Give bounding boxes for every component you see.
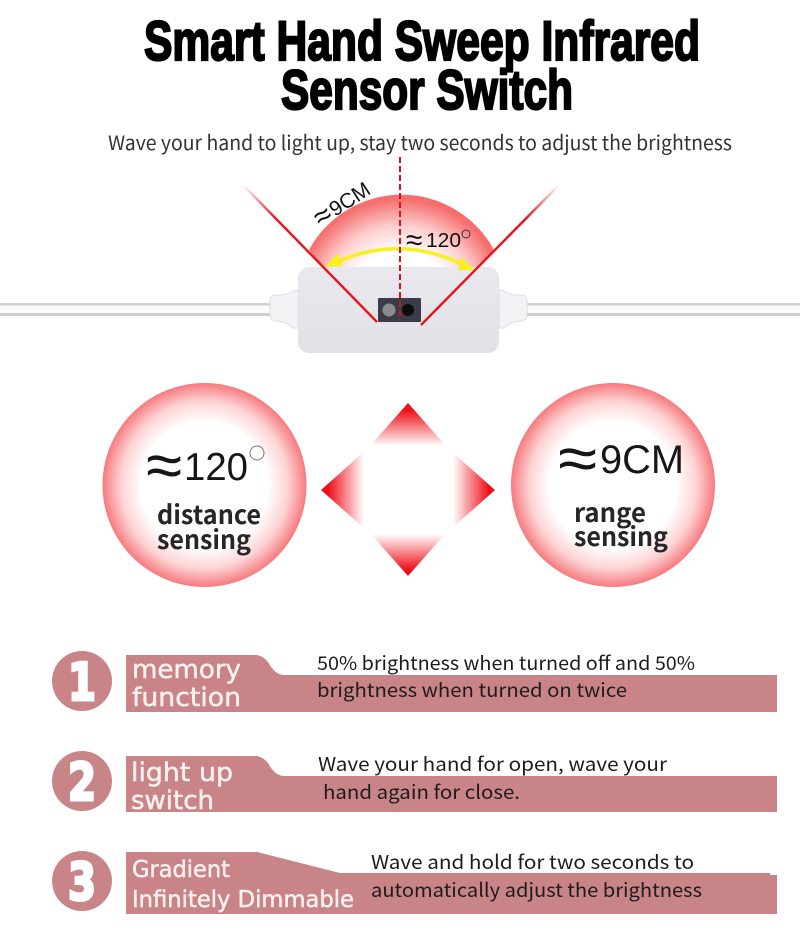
description 1 (317, 649, 695, 703)
bottom arrow (370, 533, 446, 576)
yellow arc arrow (325, 249, 475, 270)
red detection dome (309, 195, 494, 275)
title (144, 9, 700, 121)
large range value: ≈ (558, 422, 597, 494)
number badge 2 (52, 751, 112, 813)
large angle value (146, 429, 264, 501)
large range value (558, 422, 684, 494)
subtitle: Wave your hand to light up, stay two seconds to adjust the brightness (108, 127, 732, 156)
left plug (270, 290, 298, 328)
circle: 120 degrees distance sensing (102, 383, 306, 587)
diagram: sensor switch with detection cone (0, 157, 800, 353)
banner 1 (126, 655, 777, 712)
banner label 2: light up (131, 758, 233, 788)
feature row 3: gradient infinitely dimmable (52, 848, 777, 914)
left cable (0, 303, 272, 316)
description 2: hand again for close. (323, 778, 520, 805)
caption: sensing (574, 517, 668, 554)
banner 3 (126, 852, 777, 914)
switch body (298, 267, 499, 353)
right cable (526, 303, 800, 316)
banner label 3 (132, 857, 354, 913)
feature row 1: memory function (52, 649, 777, 713)
large range value: 9CM (600, 438, 684, 482)
top arrow (370, 403, 446, 446)
description 3: Wave and hold for two seconds to (371, 848, 694, 875)
description 3 (371, 848, 702, 903)
description 2: Wave your hand for open, wave your (318, 750, 668, 777)
caption (574, 493, 668, 554)
right plug (499, 290, 527, 328)
caption: sensing (157, 520, 251, 557)
label: 9CM (307, 173, 377, 234)
banner label 3: Gradient (132, 857, 230, 883)
sensor window (378, 298, 421, 322)
banner label 2 (131, 758, 233, 816)
right arrow (450, 450, 495, 530)
description 3: automatically adjust the brightness (371, 876, 702, 903)
caption (157, 495, 261, 557)
large angle value: 120 (184, 446, 248, 489)
dashed center line (399, 157, 401, 320)
large angle value: ≈ (146, 429, 182, 501)
number badge 2: 2 (68, 753, 96, 813)
caption: distance (157, 495, 261, 532)
feature row 2: light up switch (52, 750, 777, 816)
label: 9CM: 9CM (325, 178, 375, 221)
banner 2 (126, 756, 777, 812)
description 2 (318, 750, 668, 805)
description 1: 50% brightness when turned off and 50% (317, 649, 695, 676)
right red boundary line (421, 185, 559, 325)
number badge 3 (52, 851, 112, 913)
banner label 1: function (132, 683, 241, 713)
banner label 1 (132, 655, 241, 713)
number badge 1 (52, 651, 112, 713)
number badge 3: 3 (68, 853, 96, 913)
left red boundary line (243, 185, 377, 322)
label: 120 degrees: ≈ (406, 224, 422, 257)
label: 9CM: ≈ (307, 198, 339, 234)
label: 120 degrees: 120 (426, 230, 461, 252)
description 1: brightness when turned on twice (317, 676, 627, 703)
diamond arrows (321, 403, 495, 576)
banner label 2: switch (131, 786, 214, 816)
banner label 3: Infinitely Dimmable (132, 887, 354, 913)
caption: range (574, 493, 646, 530)
number badge 1: 1 (68, 653, 96, 713)
circle: 9CM range sensing (511, 383, 715, 587)
left arrow (321, 450, 366, 530)
title: Sensor Switch (281, 58, 573, 121)
banner label 1: memory (132, 655, 241, 685)
label: 120 degrees (406, 224, 470, 257)
